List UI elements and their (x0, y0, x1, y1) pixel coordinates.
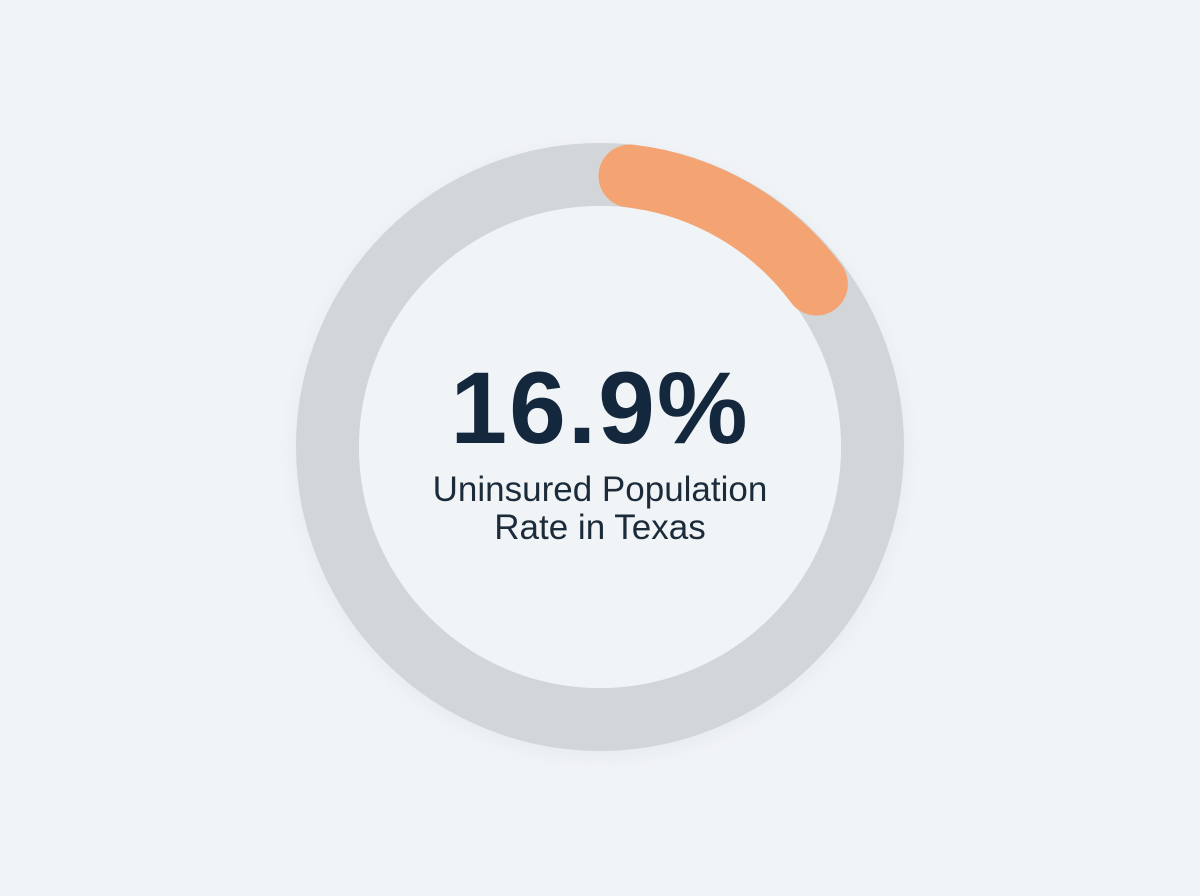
subtitle: Uninsured Population (433, 470, 767, 509)
ring track (328, 174, 872, 720)
subtitle (433, 470, 767, 547)
big number: 16.9% (450, 351, 750, 465)
subtitle: Rate in Texas (494, 508, 706, 547)
orange arc: 16.9% (630, 176, 816, 284)
